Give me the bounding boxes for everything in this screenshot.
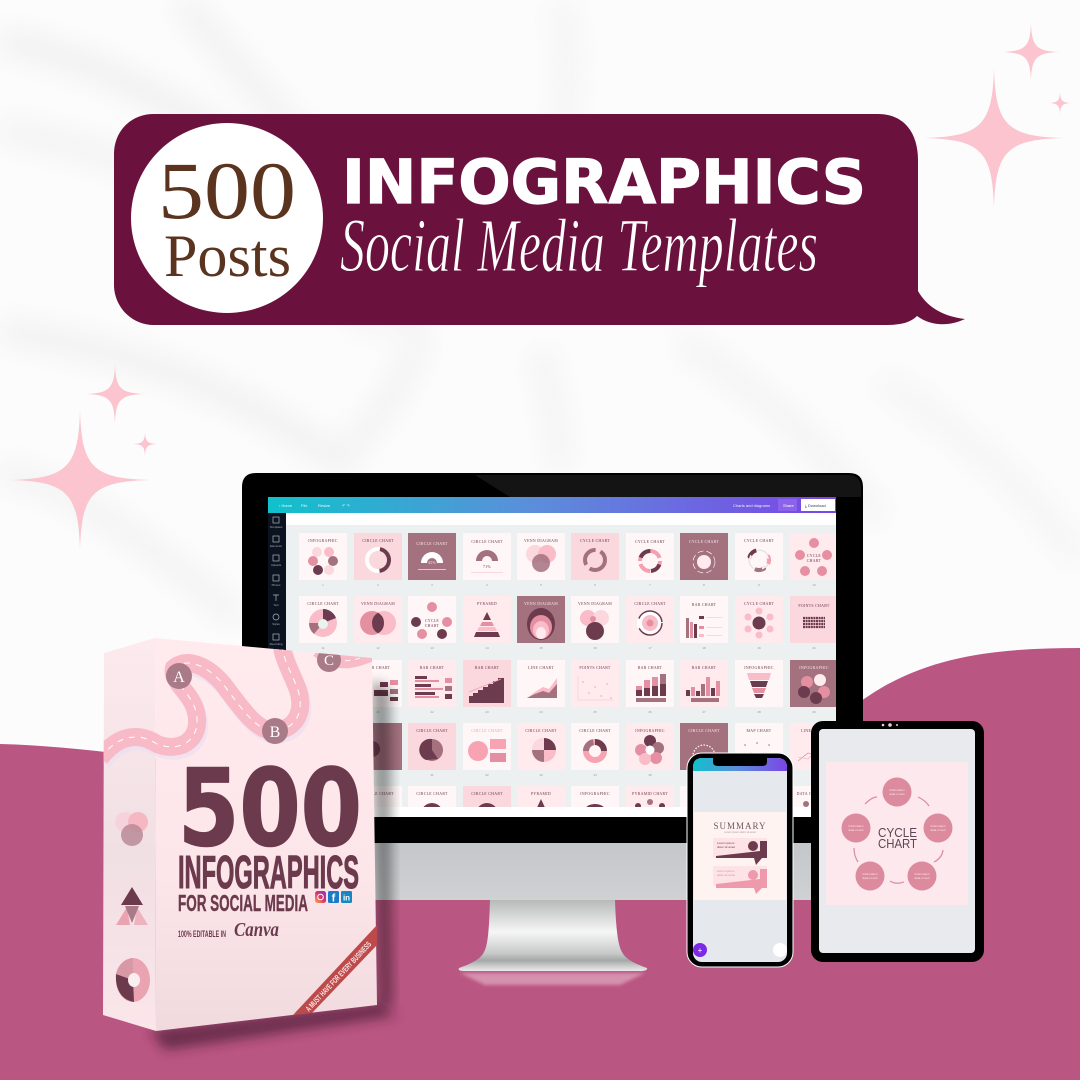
thumb 23 bar chart pink: 23 [485, 710, 489, 714]
summary heading: SUMMARY [713, 821, 767, 831]
template thumbnail grid [299, 533, 836, 833]
thumb 11 circle chart pie: CIRCLE CHART [307, 602, 339, 606]
thumb 35 infographic: INFOGRAPHIC [635, 729, 665, 733]
thumb 7 cycle chart: 7 [649, 583, 651, 587]
thumb 9 cycle chart [735, 533, 783, 587]
thumb 36 circle chart dark: 36 [702, 773, 706, 777]
cycle node labels: Information [889, 788, 905, 792]
side icon: donut [116, 958, 150, 1002]
thumb 18 bar chart [680, 596, 728, 650]
thumb 17 circle chart: CIRCLE CHART [634, 602, 666, 606]
thumb 3 circle chart dark: 3 [431, 583, 433, 587]
thumb 26 bar chart: 26 [648, 710, 652, 714]
cycle node labels: data or text [848, 828, 864, 832]
thumb 40 circle chart [408, 786, 456, 833]
thumb 5 venn diagram [517, 533, 565, 587]
editor toolbar: ↶ ↷ [342, 503, 350, 508]
editor toolbar: File [301, 503, 308, 508]
thumb 43 infographic [571, 786, 619, 833]
red ribbon [293, 925, 377, 1015]
phone app bar [693, 758, 787, 771]
thumb 7 cycle chart [626, 533, 674, 587]
thumb 34 circle chart [571, 723, 619, 777]
thumb 2 circle chart: CIRCLE CHART [362, 539, 394, 543]
thumb 21 bar chart partial: BAR CHART [366, 666, 391, 670]
thumb 36 circle chart dark [680, 723, 728, 770]
thumb 35 infographic: 35 [648, 773, 652, 777]
purple add button [693, 943, 707, 957]
editor toolbar: ⤓ Download [805, 503, 826, 508]
editor sidebar: Styles [272, 622, 280, 626]
thumb 29 infographic dark: INFOGRAPHIC [799, 666, 829, 670]
thumb 11 circle chart pie [299, 596, 347, 650]
thumb 10 cycle chart: CYCLE [807, 554, 821, 558]
road marker A [166, 663, 192, 689]
thumb 39 row five partial: CIRCLE CHART [362, 792, 394, 796]
cycle node labels: data or text [889, 792, 905, 796]
editor sidebar: Uploads [271, 563, 282, 567]
thumb 12 venn diagram: VENN DIAGRAM [361, 602, 395, 606]
white circle badge [131, 123, 323, 313]
callout dark: dolor sit amet [717, 845, 735, 849]
purple add button: + [698, 946, 703, 955]
thumb 25 points chart: POINTS CHART [579, 666, 611, 670]
thumb 19 cycle chart: CYCLE CHART [744, 602, 774, 606]
tablet mockup [811, 721, 984, 962]
thumb 26 bar chart: BAR CHART [638, 666, 663, 670]
editor toolbar: Resize [318, 503, 331, 508]
script subtitle: Social Media Templates [340, 204, 818, 288]
sparkle large left [10, 410, 150, 550]
thumb 14 pyramid [463, 596, 511, 650]
thumb 27 bar chart: BAR CHART [692, 666, 717, 670]
thumb 4 circle chart gauge [463, 533, 511, 587]
thumb 16 venn diagram: VENN DIAGRAM [578, 602, 612, 606]
thumb 42 pyramid [517, 786, 565, 833]
thumb 8 cycle chart dark [680, 533, 728, 587]
badge number: 500 [158, 145, 296, 236]
box front face [155, 638, 377, 1031]
phone card [694, 812, 786, 900]
pink wave ground [0, 648, 1080, 1080]
thumb 11 circle chart pie: 11 [321, 646, 325, 650]
thumb 24 line chart: LINE CHART [528, 666, 554, 670]
thumb 36 circle chart dark: 30% [696, 752, 712, 761]
thumb 1 infographic [299, 533, 347, 587]
thumb 26 bar chart [626, 660, 674, 714]
tablet screen [819, 729, 975, 953]
thumb 31 circle chart: CIRCLE CHART [416, 729, 448, 733]
thumb 4 circle chart gauge: CIRCLE CHART [471, 540, 503, 544]
headline: INFOGRAPHICS [342, 147, 866, 218]
thumb 27 bar chart [680, 660, 728, 714]
cycle chart card [826, 762, 968, 905]
bubble shape [114, 114, 965, 325]
thumb 25 points chart [571, 660, 619, 714]
thumb 9 cycle chart: CYCLE CHART [744, 539, 774, 543]
thumb 3 circle chart dark [408, 533, 456, 587]
editor sidebar: Text [273, 603, 279, 607]
cycle node labels: data or text [914, 876, 930, 880]
road marker A: A [173, 669, 185, 686]
callout light: Lorem ipsum [717, 869, 735, 873]
thumb 29 infographic dark [790, 660, 836, 714]
thumb 6 cycle chart: 6 [594, 583, 596, 587]
thumb 6 cycle chart: CYCLE CHART [580, 539, 610, 543]
thumb 29 infographic dark: 29 [812, 710, 816, 714]
sparkle medium left [85, 364, 145, 424]
thumb 13 cycle chart [408, 596, 456, 650]
cycle chart card: CHART [878, 836, 917, 851]
monitor bezel [242, 473, 863, 843]
thumb 41 circle chart: CIRCLE CHART [471, 792, 503, 796]
thumb 35 infographic [626, 723, 674, 777]
thumb 2 circle chart: 2 [377, 583, 379, 587]
thumb 19 cycle chart: 19 [757, 646, 761, 650]
box shadow [150, 1003, 396, 1050]
monitor chin [242, 843, 863, 900]
road marker C: C [324, 653, 334, 669]
cycle node labels: data or text [862, 876, 878, 880]
canva wordmark: Canva [234, 919, 279, 941]
thumb 33 circle chart: 33 [539, 773, 543, 777]
box title: INFOGRAPHICS [178, 846, 359, 898]
phone screen [693, 758, 787, 962]
cycle node labels: Information [914, 872, 930, 876]
editor toolbar: ‹ Home [279, 503, 293, 508]
cycle arrows [854, 797, 943, 883]
thumb 5 venn diagram: 5 [540, 583, 542, 587]
thumb 2 circle chart [354, 533, 402, 587]
thumb 13 cycle chart: CYCLE [425, 619, 439, 623]
thumb 16 venn diagram: 16 [593, 646, 597, 650]
thumb 14 pyramid: PYRAMID [477, 602, 497, 606]
pages button [773, 943, 787, 957]
thumb 20 points chart [790, 596, 836, 650]
thumb 43 infographic: INFOGRAPHIC [580, 792, 610, 796]
thumb 21 bar chart partial [372, 660, 402, 713]
thumb 28 infographic funnel [735, 660, 783, 714]
thumb 8 cycle chart dark: 8 [703, 583, 705, 587]
thumb 38 line chart: LINE CHART [801, 729, 827, 733]
thumb 1 infographic: 1 [322, 583, 324, 587]
cycle node labels: Information [848, 824, 864, 828]
cycle title: CYCLE [878, 825, 917, 840]
thumb 19 cycle chart [735, 596, 783, 650]
thumb 13 cycle chart: CHART [425, 624, 440, 628]
callout dark: Lorem ipsum [717, 841, 735, 845]
sparkle group: left [10, 364, 158, 550]
callout dark [713, 838, 767, 865]
cycle node labels: Information [862, 872, 878, 876]
sparkle group: top right [924, 23, 1072, 208]
sparkle medium [1002, 23, 1060, 81]
thumb 46 data chart: DATA CHART [797, 792, 824, 796]
desktop monitor [242, 473, 863, 985]
thumb 17 circle chart [626, 596, 674, 650]
thumb 40 circle chart: CIRCLE CHART [416, 792, 448, 796]
road graphic [100, 628, 375, 762]
social icons: in [343, 894, 350, 902]
thumb 18 bar chart: 18 [702, 646, 706, 650]
thumb 4 circle chart gauge: 71% [483, 565, 491, 569]
phone card: Lorem ipsum dolor sit amet [724, 830, 756, 834]
thumb 23 bar chart pink [463, 660, 511, 714]
cycle nodes [842, 778, 952, 890]
social icons [315, 891, 352, 904]
thumb 20 points chart: POINTS CHART [798, 604, 830, 608]
thumb 15 venn diagram dark: VENN DIAGRAM [524, 602, 558, 606]
thumb 45 white [680, 786, 728, 833]
thumb 37 map chart [735, 723, 783, 754]
editor sidebar: Recording [270, 642, 283, 646]
editor sidebar: Elements [270, 544, 282, 548]
editor sidebar: Photos [272, 583, 281, 587]
banner: speech bubble headline [114, 114, 965, 325]
box side face [103, 638, 156, 1031]
callout light: dolor sit amet [717, 873, 735, 877]
thumb 20 points chart: 20 [812, 646, 816, 650]
phone notch [713, 757, 767, 766]
thumb 22 bar chart: 22 [430, 710, 434, 714]
cycle node labels [848, 788, 946, 880]
thumb 21 bar chart partial: 21 [376, 710, 380, 714]
thumb 15 venn diagram dark [517, 596, 565, 650]
thumb 22 bar chart [408, 660, 456, 714]
editor sidebar [268, 513, 286, 817]
badge word: Posts [164, 223, 291, 289]
thumb 41 circle chart [463, 786, 511, 833]
editor sidebar: Templates [270, 525, 283, 529]
road marker B [262, 718, 288, 744]
thumb 10 cycle chart: CHART [807, 559, 822, 563]
side icon: triangle [116, 887, 148, 925]
thumb 15 venn diagram dark: 15 [539, 646, 543, 650]
thumb 44 pyramid chart [626, 786, 674, 833]
tablet camera [882, 723, 898, 727]
thumb 25 points chart: 25 [593, 710, 597, 714]
box subtitle: FOR SOCIAL MEDIA [178, 890, 308, 916]
screen [268, 497, 836, 817]
sparkle small [1048, 91, 1072, 115]
product box [100, 628, 396, 1050]
thumb 10 cycle chart: 10 [812, 583, 816, 587]
side icon: venn [115, 812, 148, 846]
smartphone mockup [687, 753, 793, 967]
thumb 17 circle chart: 17 [648, 646, 652, 650]
sparkle small left [132, 431, 158, 457]
thumb 16 venn diagram [571, 596, 619, 650]
thumb 13 cycle chart: 13 [430, 646, 434, 650]
thumb 46 data chart [790, 786, 836, 833]
thumb 22 bar chart: BAR CHART [420, 666, 445, 670]
thumb 44 pyramid chart: PYRAMID CHART [632, 792, 668, 796]
phone body [687, 753, 793, 967]
thumb 37 map chart: 37 [757, 773, 761, 777]
thumb 33 circle chart: CIRCLE CHART [525, 729, 557, 733]
thumb 32 circle chart: 32 [485, 773, 489, 777]
thumb 5 venn diagram: VENN DIAGRAM [524, 539, 558, 543]
thumb 12 venn diagram [354, 596, 402, 650]
road marker C [317, 648, 341, 672]
thumb 38 line chart [790, 723, 816, 770]
thumb 34 circle chart: 34 [593, 773, 597, 777]
thumb 10 cycle chart [790, 533, 836, 587]
thumb 33 circle chart [517, 723, 565, 777]
thumb 28 infographic funnel: 28 [757, 710, 761, 714]
thumb 3 circle chart dark: 45% [428, 561, 436, 565]
thumb 4 circle chart gauge: 4 [486, 583, 488, 587]
sparkle large [924, 68, 1064, 208]
road marker B: B [270, 724, 280, 741]
thumb 42 pyramid: PYRAMID [531, 792, 551, 796]
cycle node labels: Information [930, 824, 946, 828]
thumb 9 cycle chart: 9 [758, 583, 760, 587]
thumb 31 circle chart [408, 723, 456, 777]
red ribbon: A MUST HAVE FOR EVERY BUSINESS [304, 940, 373, 1013]
thumb 32 circle chart: CIRCLE CHART [471, 729, 503, 733]
thumb 12 venn diagram: 12 [376, 646, 380, 650]
cycle node labels: data or text [930, 828, 946, 832]
thumb 39 row five partial [354, 786, 402, 833]
thumb 6 cycle chart [571, 533, 619, 587]
thumb 37 map chart: MAP CHART [747, 729, 772, 733]
thumb 14 pyramid: 14 [485, 646, 489, 650]
thumb 24 line chart: 24 [539, 710, 543, 714]
thumb 7 cycle chart: CYCLE CHART [635, 540, 665, 544]
editable note: 100% EDITABLE IN [178, 929, 226, 939]
thumb 18 bar chart: BAR CHART [692, 603, 717, 607]
editor toolbar [268, 497, 836, 513]
monitor stand [459, 900, 647, 985]
callout light [713, 866, 767, 894]
thumb 1 infographic: INFOGRAPHIC [308, 539, 338, 543]
editor toolbar: Share [783, 503, 794, 508]
thumb 27 bar chart: 27 [702, 710, 706, 714]
tablet body [811, 721, 984, 962]
editor toolbar: Charts and diagrams [733, 503, 770, 508]
thumb 28 infographic funnel: INFOGRAPHIC [744, 666, 774, 670]
thumb 23 bar chart pink: BAR CHART [475, 666, 500, 670]
thumb 31 circle chart: 31 [430, 773, 434, 777]
box number: 500 [178, 747, 362, 870]
thumb 32 circle chart [463, 723, 511, 777]
thumb 34 circle chart: CIRCLE CHART [579, 729, 611, 733]
thumb 3 circle chart dark: CIRCLE CHART [416, 542, 448, 546]
thumb 30 dark partial [372, 723, 402, 770]
thumb 36 circle chart dark: CIRCLE CHART [688, 729, 720, 733]
thumb 24 line chart [517, 660, 565, 714]
thumb 8 cycle chart dark: CYCLE CHART [689, 540, 719, 544]
social icons: f [332, 892, 336, 904]
